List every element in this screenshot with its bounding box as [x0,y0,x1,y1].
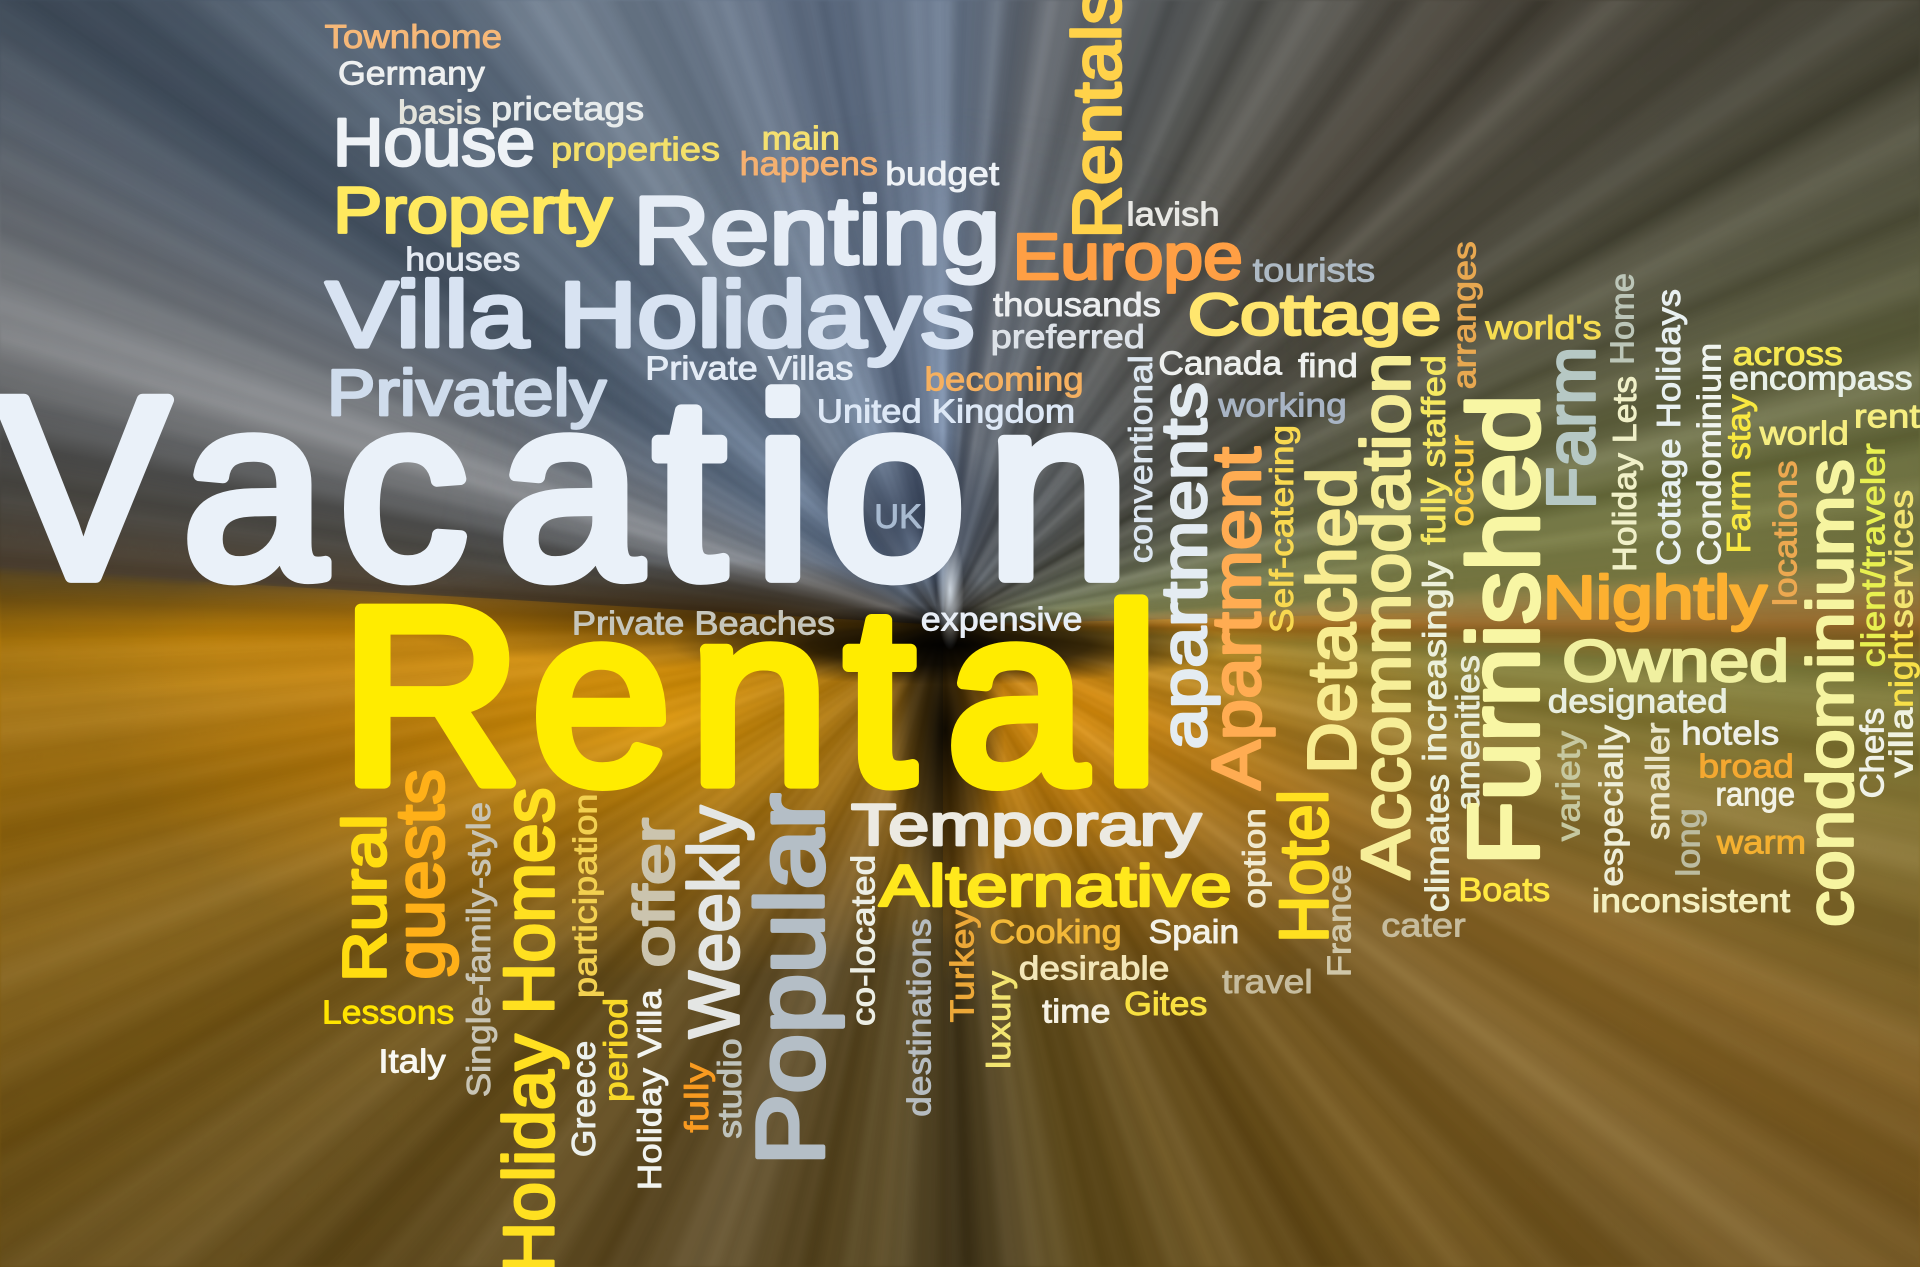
word: House: House [333,105,535,180]
word: travel: travel [1222,964,1313,1001]
word: Townhome: Townhome [324,19,502,56]
vertical word: condominiums: condominiums [1794,459,1867,927]
vertical word: option: option [1236,808,1272,909]
vertical word: arranges: arranges [1447,241,1484,389]
vertical word: long: long [1671,808,1708,877]
word: Spain: Spain [1149,914,1239,951]
word: Cottage: Cottage [1188,282,1441,347]
word: Boats: Boats [1458,872,1550,909]
word: find: find [1298,348,1358,385]
word: Temporary: Temporary [851,793,1202,858]
vertical word: Accommodation: Accommodation [1347,353,1424,879]
vertical word: Rural: Rural [331,814,399,982]
vertical word: Popular: Popular [738,793,844,1166]
vertical word: Rentals: Rentals [1058,0,1135,239]
word: range: range [1716,777,1795,814]
word: Nightly: Nightly [1543,563,1767,631]
word: Villa Holidays: Villa Holidays [326,263,975,367]
vertical word: period: period [598,998,635,1102]
word: preferred: preferred [991,319,1145,356]
vertical word: conventional: conventional [1123,355,1160,563]
vertical word: client/traveler: client/traveler [1855,443,1892,667]
word: encompass: encompass [1729,360,1913,397]
vertical word: France: France [1322,865,1359,977]
word: Private Beaches: Private Beaches [572,605,835,642]
vertical word: occur: occur [1444,435,1481,527]
word: lavish: lavish [1127,196,1220,233]
vertical word: Hotel: Hotel [1265,790,1342,943]
vertical word: apartments: apartments [1149,382,1220,749]
vertical word: increasingly: increasingly [1417,560,1454,762]
word: broad: broad [1698,749,1794,786]
word: world: world [1758,416,1849,453]
main title word: Vacation: Vacation [0,345,1130,632]
vertical word: variety: variety [1551,731,1588,841]
word: budget: budget [885,156,999,193]
word: Private Villas: Private Villas [645,351,853,388]
word: designated: designated [1548,684,1728,721]
vertical word: offer: offer [622,818,685,967]
vertical word: night: night [1884,631,1920,708]
word: hotels: hotels [1681,716,1779,753]
vertical word: Holiday Lets: Holiday Lets [1607,376,1644,572]
vertical word: amenities: amenities [1450,655,1487,811]
word: Gites: Gites [1124,986,1207,1023]
word: UK: UK [874,498,922,536]
word: rent: rent [1854,398,1920,435]
word: Renting: Renting [633,178,1000,284]
vertical word: locations: locations [1767,460,1804,606]
vertical word: co-located: co-located [845,855,882,1026]
word: Canada: Canada [1158,346,1283,383]
vertical word: especially: especially [1593,724,1630,887]
vertical word: Home: Home [1604,273,1641,365]
word: warm: warm [1716,824,1806,861]
word: main: main [762,120,840,157]
vertical word: Furnished: Furnished [1448,394,1560,866]
vertical word: villa: villa [1884,707,1920,778]
vertical word: Detached: Detached [1294,468,1371,774]
word: pricetags: pricetags [491,91,644,128]
vertical word: Weekly: Weekly [675,805,754,1038]
vertical word: Farm: Farm [1532,347,1609,509]
vertical word: services: services [1884,490,1920,628]
vertical word: Holiday Homes: Holiday Homes [490,787,569,1267]
word: Privately: Privately [327,356,607,429]
vertical word: fully staffed: fully staffed [1416,355,1453,545]
vertical word: Holiday Villa: Holiday Villa [632,989,669,1190]
word: thousands: thousands [993,287,1161,324]
word: happens: happens [740,146,878,183]
word: properties: properties [551,131,720,168]
main title word: Rental: Rental [340,556,1159,836]
vertical word: participation: participation [567,793,604,998]
word: tourists: tourists [1253,253,1375,290]
vertical word: Self-catering: Self-catering [1264,425,1301,633]
vertical word: Condominium: Condominium [1691,343,1728,566]
vertical word: luxury: luxury [981,971,1018,1069]
vertical word: climates: climates [1420,774,1457,912]
vertical word: Greece: Greece [566,1041,603,1157]
vertical word: Single-family-style: Single-family-style [461,802,498,1097]
vertical word: Cottage Holidays: Cottage Holidays [1651,289,1688,566]
word: cater: cater [1381,908,1466,945]
word: Germany: Germany [338,56,485,93]
vertical word: guests: guests [381,769,458,980]
word: desirable: desirable [1019,951,1169,988]
vertical word: Farm stay: Farm stay [1721,394,1758,553]
vertical word: Turkey: Turkey [944,909,981,1022]
word: becoming: becoming [924,362,1084,399]
word: Europe: Europe [1013,220,1243,293]
word: expensive: expensive [921,602,1082,639]
word: world's: world's [1484,310,1602,347]
word: Italy: Italy [378,1044,446,1081]
word: United Kingdom: United Kingdom [817,393,1075,430]
vertical word: Chefs: Chefs [1854,708,1891,798]
vertical word: fully: fully [679,1062,716,1133]
vertical word: Apartment: Apartment [1198,447,1275,790]
word: working: working [1217,387,1347,424]
word: Owned: Owned [1562,629,1789,694]
word: across: across [1733,336,1843,373]
vertical word: studio: studio [712,1038,749,1139]
word: Lessons: Lessons [322,995,454,1032]
vertical word: destinations: destinations [902,918,939,1117]
word: inconsistent: inconsistent [1592,883,1790,920]
vertical word: smaller: smaller [1640,722,1677,840]
word: time: time [1042,993,1111,1030]
word: houses: houses [405,242,520,279]
word: basis: basis [398,95,481,132]
word: Property: Property [333,174,613,247]
word: Alternative: Alternative [879,854,1232,919]
word: Cooking: Cooking [989,914,1122,951]
